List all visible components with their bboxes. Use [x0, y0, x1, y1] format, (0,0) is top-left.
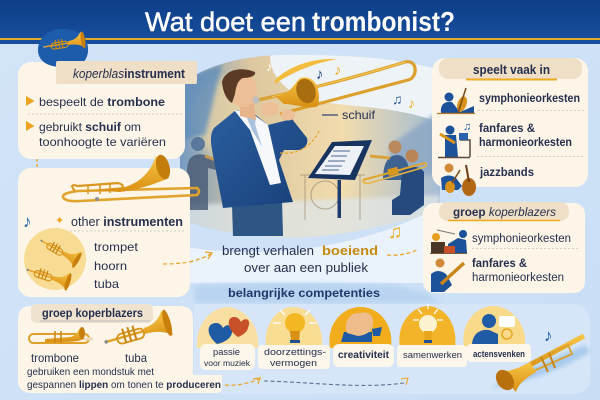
competency: passie voor muziek — [197, 307, 258, 370]
competency: doorzettingsvermogen: doorzettings- — [264, 347, 326, 358]
icon: music note: ♫ — [388, 222, 402, 243]
title: Wat doet een — [145, 7, 306, 37]
row: fanfares: fanfares & — [472, 256, 527, 270]
bullet 2 — [26, 121, 34, 131]
label: schuif — [322, 108, 376, 122]
man jacket — [211, 110, 307, 208]
competency: actensvenken: actensvenken — [473, 349, 525, 359]
music notes: ♪ — [408, 95, 415, 111]
row: symphonieorkesten: symphonieorkesten — [472, 233, 571, 245]
arrow: left to text — [170, 252, 212, 264]
man shirt — [234, 110, 281, 185]
row: fanfares: fanfares & — [479, 121, 535, 135]
competency: doorzettingsvermogen: vermogen — [270, 358, 317, 369]
panel: competencies backdrop — [194, 304, 590, 394]
panel: other instrumenten — [18, 168, 190, 297]
competency: passie voor muziek: voor muziek — [204, 358, 251, 368]
man trousers — [232, 200, 283, 236]
panel: groep koperblazers right — [423, 202, 585, 293]
instrument list: hoorn — [94, 259, 127, 273]
panel: groep koperblazers right: harmonieorkesten — [472, 272, 564, 284]
musician left — [187, 137, 218, 210]
text: brengt verhalen boeiend — [222, 243, 378, 275]
instrument list: tuba — [94, 277, 119, 291]
tab — [439, 58, 582, 79]
bullet 2 text: gebruikt schuif om — [39, 120, 141, 134]
instrument labels: trombone — [31, 351, 79, 365]
panel: speelt vaak in — [432, 58, 588, 196]
header banner — [0, 0, 600, 44]
music notes — [266, 59, 415, 111]
music notes: ♪ — [266, 59, 272, 74]
music notes: ♫ — [392, 91, 402, 107]
tab — [439, 202, 569, 221]
tab — [31, 304, 153, 323]
panel: groep koperblazers left — [18, 304, 222, 393]
competency: samenwerken: samenwerken — [403, 350, 462, 361]
bullet 1 — [26, 96, 34, 106]
panel: groep koperblazers left: gespannen lippen om tonen te produceren — [27, 379, 221, 391]
competency: samenwerken — [397, 304, 467, 367]
panel: koperblasinstrument — [18, 29, 197, 159]
tab — [56, 61, 197, 84]
man head — [240, 103, 256, 120]
icon: seated musician: ♫ — [463, 121, 471, 133]
competency: creativiteit: creativiteit — [338, 350, 390, 361]
panel: speelt vaak in: harmonieorkesten — [479, 135, 572, 149]
icon: brass players — [430, 230, 467, 254]
heading: groep koperblazers — [42, 306, 143, 320]
panel: koperblasinstrument: toonhoogte te variëren — [39, 135, 166, 149]
icon: note: ♪ — [23, 212, 32, 231]
icon: seated musician — [438, 121, 471, 158]
title — [145, 6, 455, 37]
icon: shadow and large trumpet — [490, 326, 590, 394]
bullet 1 text: bespeelt de trombone — [39, 95, 165, 109]
text: brengt verhalen boeiend: boeiend — [322, 243, 378, 258]
music stand — [308, 140, 372, 218]
heading: speelt vaak in — [473, 63, 550, 77]
music notes: ♪ — [334, 62, 342, 79]
icon: star: ✦ — [55, 215, 64, 227]
competency: passie voor muziek: passie — [213, 347, 240, 357]
competency: actensvenken — [463, 306, 531, 362]
competency: creativiteit — [329, 307, 394, 367]
icon: trumpet — [100, 309, 174, 354]
competency: doorzettingsvermogen — [258, 307, 330, 369]
arrow — [280, 131, 319, 153]
icon: instruments circle — [24, 228, 86, 291]
band: belangrijke competenties: belangrijke competenties — [228, 286, 380, 300]
music notes: ♪ — [316, 66, 324, 83]
tab heading: koperblasinstrument — [73, 67, 186, 81]
central illustration: trombonist on stage — [180, 54, 440, 238]
band: belangrijke competenties — [193, 283, 440, 303]
arrow: instruments to text — [163, 261, 195, 264]
arrow: to competencies — [225, 378, 260, 385]
heading: other instrumenten — [71, 215, 183, 229]
icon: musician — [431, 258, 464, 292]
label: schuif: schuif — [342, 108, 376, 122]
text: brengt verhalen boeiend: brengt verhalen — [222, 244, 314, 258]
icon: trombone — [29, 327, 93, 343]
title: trombonist? — [312, 6, 455, 37]
slide, bell and mouthpiece — [252, 62, 415, 114]
icon: violinist — [437, 88, 475, 114]
row: symphonieorkesten: symphonieorkesten — [479, 91, 580, 105]
hands — [261, 102, 279, 116]
row: jazzbands: jazzbands — [479, 165, 534, 179]
panel: groep koperblazers left: tuba — [125, 351, 147, 365]
icon: trumpet badge — [38, 29, 88, 72]
stage drum and chairs — [300, 175, 365, 220]
swoosh — [275, 59, 337, 84]
musicians right — [363, 140, 426, 215]
arrow: right from text — [387, 250, 417, 255]
instrument list — [94, 240, 139, 291]
heading: groep koperblazers — [453, 205, 556, 219]
arrow: dashed long — [264, 378, 408, 385]
icon: jazz musicians — [441, 164, 476, 196]
arrow: panel to panel — [37, 159, 53, 188]
instrument list: trompet — [94, 240, 139, 254]
icon: large trombone — [63, 153, 199, 201]
text: brengt verhalen boeiend: over aan een publiek — [244, 261, 369, 275]
description: gebruiken een mondstuk met — [27, 366, 154, 378]
icon: shadow and large trumpet: ♪ — [544, 326, 552, 345]
